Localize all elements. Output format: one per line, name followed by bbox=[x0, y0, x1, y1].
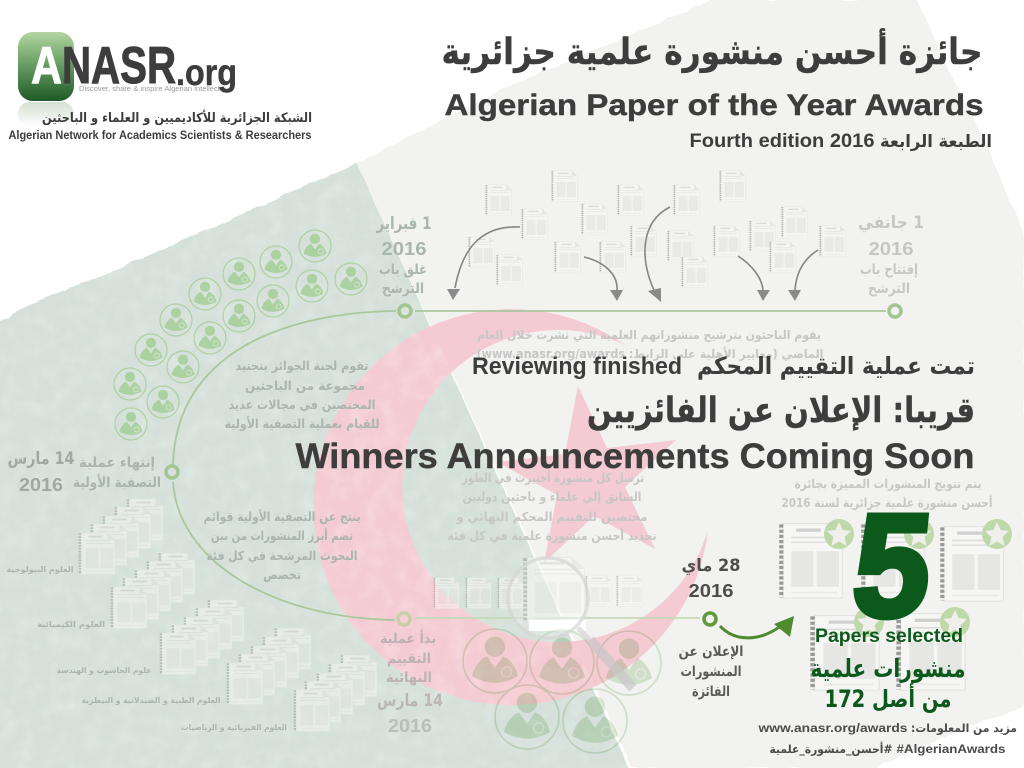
arrow to winners bbox=[720, 616, 794, 638]
edition line: الطبعة الرابعة bbox=[880, 132, 992, 152]
coronation description: يتم تتويج المنشورات المميزة بجائزة bbox=[794, 476, 982, 491]
icon: magnifying glass bbox=[508, 558, 633, 688]
final review description: ترسل كل منشورة أختيرت في الطور bbox=[461, 469, 644, 485]
more information line: مزيد من المعلومات: bbox=[911, 721, 1017, 736]
milestone: 1 january: إفتتاح باب bbox=[860, 262, 918, 278]
screening description: البحوث المرشحة في كل فئة bbox=[206, 548, 358, 563]
winners announcement label bbox=[678, 644, 744, 700]
logo bbox=[18, 32, 237, 126]
discipline labels: علوم الحاسوب و الهندسة bbox=[56, 666, 152, 675]
jury description: للقيام بعملية التصفية الأولية bbox=[224, 416, 380, 432]
submission papers bbox=[469, 171, 845, 288]
milestone: 1 february: الترشح bbox=[382, 281, 424, 297]
screening description bbox=[204, 509, 360, 582]
more information line: www.anasr.org/awards bbox=[757, 723, 908, 735]
milestone: 14 march first screening bbox=[8, 449, 161, 495]
final review description: السابق إلي علماء و باحثين دوليين bbox=[462, 489, 642, 504]
scientific papers arabic: منشورات علمية bbox=[810, 654, 966, 684]
reviewers icons bbox=[463, 629, 661, 753]
stack: physics bbox=[295, 655, 377, 732]
more information line bbox=[757, 721, 1017, 736]
nomination description: الماضي (معايير الأهلية على الرابط: www.anasr.org/awards) bbox=[476, 346, 824, 361]
milestone: 1 january: 1 جانفي bbox=[858, 213, 924, 233]
coming soon english: Winners Announcements Coming Soon bbox=[296, 437, 974, 476]
jury description: تقوم لجنة الجوائز بتجنيد bbox=[236, 358, 368, 374]
nomination description: يقوم الباحثون بترشيح منشوراتهم العلمية التي نشرت خلال العام bbox=[477, 328, 821, 343]
winning papers with star badges bbox=[781, 519, 1012, 690]
out of 172: من أصل 172 bbox=[824, 683, 952, 713]
coronation description: أحسن منشورة علمية جزائرية لسنة 2016 bbox=[782, 494, 993, 510]
screening description: ينتج عن التصفية الأولية قوائم bbox=[204, 509, 360, 524]
final date: 28 may: 2016 bbox=[688, 581, 734, 601]
nomination description bbox=[476, 328, 824, 361]
papers selected label: Papers selected bbox=[815, 626, 963, 647]
jury members icons bbox=[114, 230, 367, 440]
winners announcement label: الفائزة bbox=[692, 684, 730, 700]
jury description bbox=[224, 358, 380, 432]
timeline curve bbox=[173, 311, 886, 620]
milestone: final evaluation start bbox=[377, 629, 443, 736]
milestone: 14 march first screening: إنتهاء عملية bbox=[79, 455, 155, 471]
organisation name english: Algerian Network for Academics Scientists & Researchers bbox=[8, 128, 312, 142]
milestone: 1 february: 1 فبراير bbox=[376, 214, 432, 234]
logo icon bbox=[18, 32, 74, 101]
logo tagline: Discover, share & inspire Algerian intellect. bbox=[79, 84, 222, 93]
milestone: 1 february bbox=[376, 214, 432, 297]
final review description bbox=[448, 469, 656, 543]
stack: chemistry bbox=[112, 553, 195, 629]
milestone: 1 january bbox=[858, 213, 924, 297]
review finished line: Reviewing finished bbox=[472, 353, 682, 380]
milestone: final evaluation start: بدأ عملية bbox=[380, 629, 436, 647]
milestone: final evaluation start: 2016 bbox=[388, 716, 432, 736]
screening description: تخصص bbox=[263, 567, 301, 582]
final review description: مختصين للتقييم المحكم النهائي و bbox=[456, 509, 648, 524]
final date: 28 may bbox=[682, 556, 740, 601]
logo wordmark: A bbox=[31, 37, 62, 95]
organisation name arabic: الشبكة الجزائرية للأكاديميين و العلماء و الباحثين bbox=[42, 109, 312, 126]
milestone: 14 march first screening: 2016 bbox=[19, 475, 63, 495]
hashtags line: #AlgerianAwards bbox=[896, 744, 1006, 756]
discipline labels bbox=[6, 565, 287, 732]
big number 5: 5 bbox=[847, 485, 938, 648]
magnifier white patch bbox=[529, 620, 586, 631]
discipline labels: العلوم البيولوجية bbox=[6, 565, 74, 574]
edition line bbox=[690, 131, 992, 152]
coronation description bbox=[782, 476, 993, 510]
final review papers row bbox=[434, 557, 642, 623]
milestone: 1 february: غلق باب bbox=[379, 262, 427, 278]
logo domain: .org bbox=[176, 52, 237, 93]
jury description: المختصين في مجالات عديد bbox=[228, 397, 376, 412]
milestone: 1 january: الترشح bbox=[868, 281, 910, 297]
milestone: 1 february: 2016 bbox=[382, 239, 426, 259]
milestone: 14 march first screening: 14 مارس bbox=[8, 449, 75, 469]
milestone: final evaluation start: 14 مارس bbox=[377, 691, 443, 711]
milestone: final evaluation start: النهائية bbox=[386, 670, 432, 686]
edition line: Fourth edition 2016 bbox=[690, 131, 874, 152]
title english: Algerian Paper of the Year Awards bbox=[444, 89, 984, 122]
screening description: تضم أبرز المنشورات من بين bbox=[211, 527, 353, 543]
logo reflection bbox=[18, 102, 74, 126]
final review description: تحديد أحسن منشورة علمية في كل فئة bbox=[448, 527, 656, 543]
paper stacks by discipline bbox=[80, 499, 377, 732]
stack: biology bbox=[80, 499, 163, 575]
discipline labels: العلوم الكيميائية bbox=[37, 620, 105, 629]
discipline labels: العلوم الفيزيائية و الرياضيات bbox=[181, 723, 287, 732]
milestone: 14 march first screening: التصفية الأولية bbox=[73, 474, 161, 491]
discipline labels: العلوم الطبية و الصيدلانية و البيطرية bbox=[82, 696, 221, 705]
milestone: final evaluation start: التقييم bbox=[387, 651, 431, 667]
arrows into timeline bbox=[447, 207, 818, 302]
review finished line: تمت عملية التقييم المحكم bbox=[697, 352, 975, 380]
review finished line bbox=[472, 352, 975, 380]
jury description: مجموعة من الباحثين bbox=[245, 378, 365, 393]
timeline nodes bbox=[166, 305, 901, 625]
winners announcement label: الإعلان عن bbox=[678, 644, 744, 660]
winners announcement label: المنشورات bbox=[680, 664, 742, 680]
milestone: 1 january: 2016 bbox=[868, 239, 914, 259]
hashtags line: #أحسن_منشورة_علمية bbox=[770, 741, 892, 757]
logo name: NASR bbox=[62, 37, 176, 95]
final date: 28 may: 28 ماي bbox=[682, 556, 740, 576]
stack: computer science bbox=[161, 600, 244, 675]
stack: medicine bbox=[228, 628, 311, 705]
hashtags line bbox=[770, 741, 1006, 757]
